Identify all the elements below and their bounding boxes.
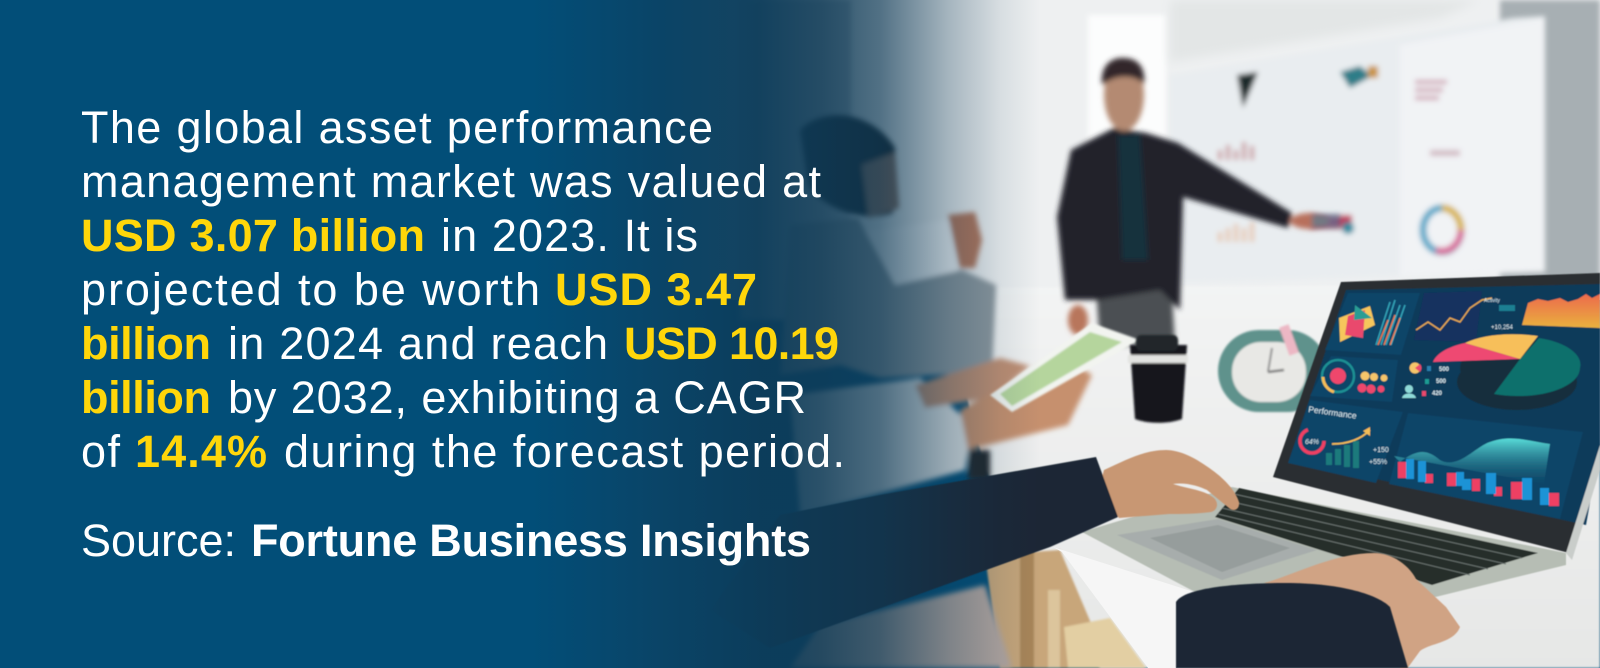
- panel: area chart: [1522, 294, 1600, 328]
- source line: Source:: [81, 515, 236, 566]
- line 6: by 2032, exhibiting a CAGR: [228, 372, 806, 423]
- raised hand: [948, 212, 982, 268]
- text block: market summary: [81, 102, 845, 477]
- line 3: in 2023. It is: [441, 210, 698, 261]
- small legend: [1402, 362, 1450, 398]
- laptop base: [1082, 487, 1566, 603]
- photo: office meeting scene: [500, 0, 1600, 668]
- small legend: 420: [1432, 391, 1443, 397]
- line 5: [81, 318, 839, 369]
- line 4: USD 3.47: [555, 264, 757, 315]
- panel: performance: 64%: [1305, 439, 1319, 446]
- line 3: USD 3.07 billion: [81, 210, 425, 261]
- left hand: [710, 450, 1239, 648]
- small legend: 500: [1436, 379, 1447, 385]
- left sleeve: [710, 457, 1118, 648]
- striped trousers: [790, 585, 1012, 668]
- dark gap: [968, 450, 990, 480]
- gradient overlay: blue fade: [0, 0, 1040, 668]
- panel: performance: Performance: [1308, 404, 1358, 421]
- right sleeve: [1176, 583, 1408, 668]
- laptop lid: [1273, 273, 1600, 553]
- line 5: in 2024 and reach: [228, 318, 608, 369]
- activity labels: +10,254: [1491, 325, 1514, 331]
- line 5: USD 10.19: [624, 318, 839, 369]
- small legend: 500: [1439, 367, 1450, 373]
- line 4: projected to be worth: [81, 264, 540, 315]
- forearm skin: [915, 358, 1030, 408]
- line 3: [81, 210, 698, 261]
- presenter jacket: [1057, 128, 1292, 310]
- table top: [940, 284, 1600, 668]
- source line: Fortune Business Insights: [251, 515, 811, 566]
- line 5: billion: [81, 318, 211, 369]
- laptop hinge edge: [1566, 445, 1600, 560]
- laptop: [1082, 273, 1600, 603]
- white sleeve forearm: [790, 378, 972, 515]
- ceiling strip: [1170, 0, 1480, 62]
- right grey wall: [1500, 0, 1600, 290]
- whiteboard with blurred charts: [1170, 16, 1545, 282]
- coffee cup: [1128, 335, 1188, 423]
- woman body: [780, 218, 996, 378]
- activity labels: Activity: [1484, 298, 1500, 304]
- bright column: [1088, 15, 1166, 285]
- woman hair: [800, 115, 895, 216]
- room wall: [500, 0, 1600, 300]
- presenter trousers: [1094, 260, 1175, 345]
- pie chart: [1433, 334, 1580, 410]
- white notepad: [862, 220, 965, 330]
- presenter: [1057, 58, 1340, 345]
- panel: performance: [1288, 400, 1403, 483]
- line 2: management market was valued at: [81, 156, 821, 207]
- line 7: of: [81, 426, 120, 477]
- activity labels: [1484, 298, 1515, 331]
- panel: ring chart: [1310, 356, 1398, 402]
- panel: line chart: [1414, 291, 1492, 342]
- darker pillar at left: [740, 0, 851, 320]
- line 6: billion: [81, 372, 211, 423]
- panel: performance: +55%: [1369, 459, 1387, 466]
- clock: [1218, 324, 1328, 412]
- keyboard: [1215, 488, 1538, 585]
- woman face: [862, 153, 899, 218]
- line 7: during the forecast period.: [284, 426, 845, 477]
- seated woman: [780, 115, 1092, 515]
- presenter hands: [1068, 305, 1088, 335]
- line 7: 14.4%: [135, 426, 267, 477]
- wood furniture: [985, 550, 1146, 668]
- screen: [1289, 284, 1600, 525]
- panel: bar chart: [1389, 413, 1583, 519]
- panel: performance: +150: [1373, 447, 1389, 454]
- right hand: [1264, 553, 1460, 668]
- trackpad: [1117, 519, 1317, 580]
- line 1: The global asset performance: [81, 102, 713, 153]
- line 4: [81, 264, 757, 315]
- panel: radar chart: [1325, 293, 1420, 355]
- presenter head: [1104, 59, 1144, 131]
- desk front edge: [1053, 547, 1194, 668]
- presenter shirt: [1118, 135, 1148, 260]
- tablet: [990, 323, 1140, 412]
